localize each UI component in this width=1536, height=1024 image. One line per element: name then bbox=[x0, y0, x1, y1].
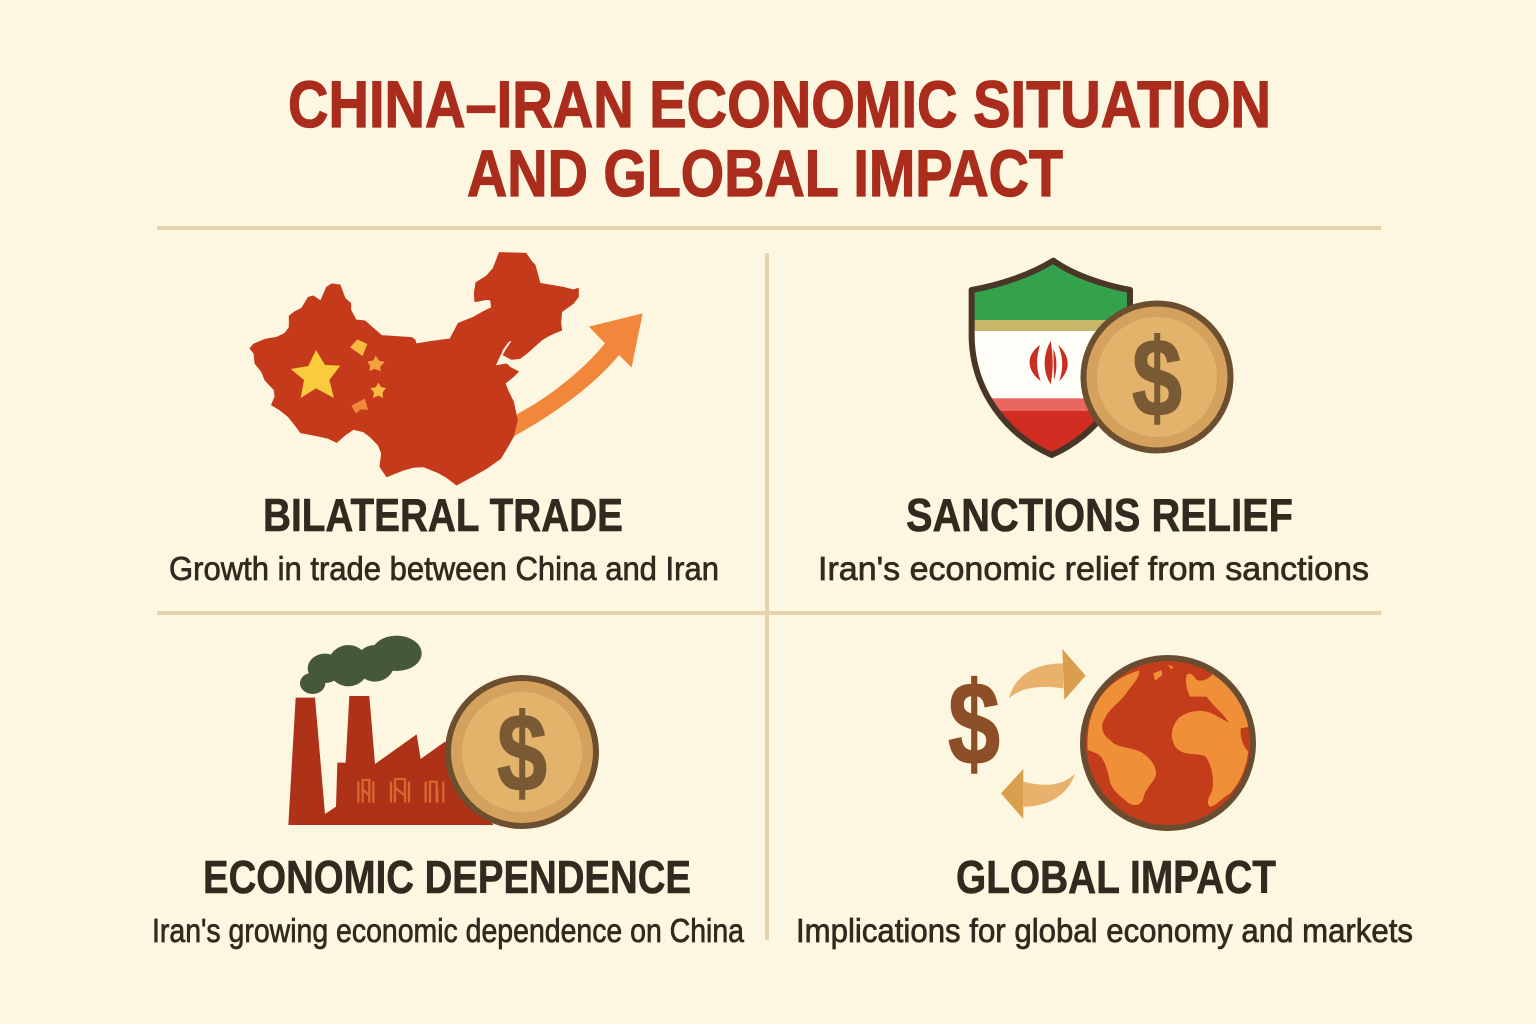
description: Iran's growing economic dependence on China bbox=[152, 912, 745, 949]
icon: small stars bbox=[350, 339, 386, 414]
panel: global impact bbox=[796, 649, 1413, 949]
icon: coin bbox=[1084, 304, 1230, 450]
emblem bbox=[1030, 341, 1068, 384]
icon: factory with smoke bbox=[288, 636, 493, 825]
icon: China map with growth arrow bbox=[250, 253, 643, 485]
factory bbox=[288, 696, 493, 825]
heading: ECONOMIC DEPENDENCE bbox=[203, 851, 691, 903]
icon: coin: $ bbox=[497, 692, 547, 815]
icon: coin: $ bbox=[1132, 317, 1182, 440]
description: Iran's economic relief from sanctions bbox=[818, 550, 1369, 587]
map: China bbox=[250, 253, 578, 485]
arrow: trade growth bbox=[513, 313, 643, 437]
smoke bbox=[300, 636, 422, 694]
icon: globe bbox=[1083, 658, 1253, 828]
icon: exchange arrows bbox=[1001, 649, 1086, 819]
panel: sanctions relief bbox=[818, 255, 1369, 587]
panel: economic dependence bbox=[152, 636, 745, 949]
icon: dollar sign: $ bbox=[948, 658, 1000, 790]
description: Growth in trade between China and Iran bbox=[169, 550, 719, 587]
factory windows bbox=[358, 779, 443, 803]
heading: SANCTIONS RELIEF bbox=[906, 489, 1293, 541]
heading: BILATERAL TRADE bbox=[263, 489, 623, 541]
icon: Iran flag shield bbox=[967, 255, 1137, 458]
heading: GLOBAL IMPACT bbox=[956, 851, 1276, 903]
icon: large star bbox=[291, 350, 340, 398]
title bbox=[288, 67, 1271, 210]
description: Implications for global economy and markets bbox=[796, 912, 1413, 949]
title: AND GLOBAL IMPACT bbox=[467, 136, 1063, 210]
panel: bilateral trade bbox=[169, 253, 719, 587]
icon: coin bbox=[448, 678, 596, 826]
title: CHINA–IRAN ECONOMIC SITUATION bbox=[288, 67, 1271, 141]
